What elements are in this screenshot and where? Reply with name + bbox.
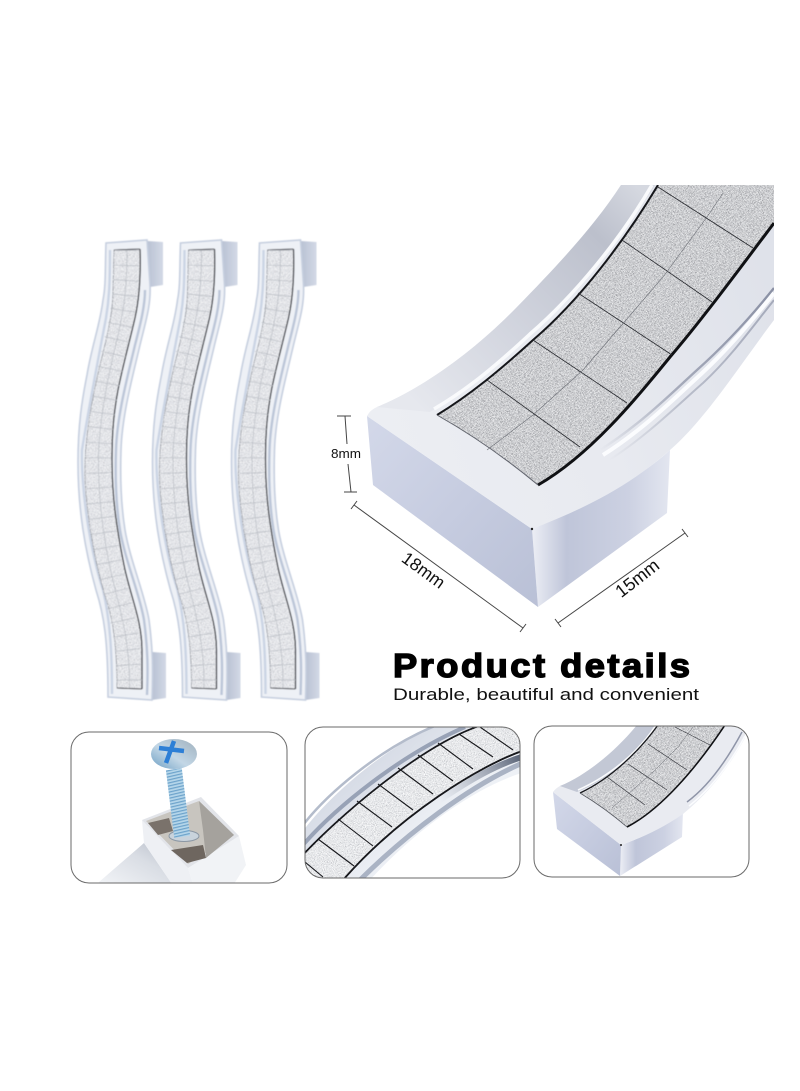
chrome arc: [300, 725, 525, 882]
large close-up of handle end: [367, 185, 774, 607]
handle body: [99, 843, 172, 884]
panel: end close-up: [534, 725, 749, 877]
dimension: 8mm: 8mm: [331, 446, 361, 461]
panel: inlay close-up: [300, 725, 525, 882]
dimension: 18mm: [351, 501, 526, 632]
dimension: 15mm: 15mm: [611, 555, 663, 602]
screw: [151, 739, 199, 842]
three handles: front view: [78, 240, 320, 700]
handle 3: [232, 240, 320, 700]
dimension: 8mm: [331, 416, 361, 492]
inlay dividers: [305, 727, 513, 877]
panel: screw detail: [71, 732, 287, 884]
subheading: Durable, beautiful and convenient: [393, 685, 699, 704]
inlay band: [300, 725, 525, 880]
dimension: 15mm: [555, 529, 688, 627]
mounting block: [142, 797, 246, 884]
dimension: 18mm: 18mm: [398, 548, 449, 593]
handle 1: [78, 240, 166, 700]
heading: Product details: Product details: [393, 648, 690, 685]
handle 2: [152, 240, 240, 700]
